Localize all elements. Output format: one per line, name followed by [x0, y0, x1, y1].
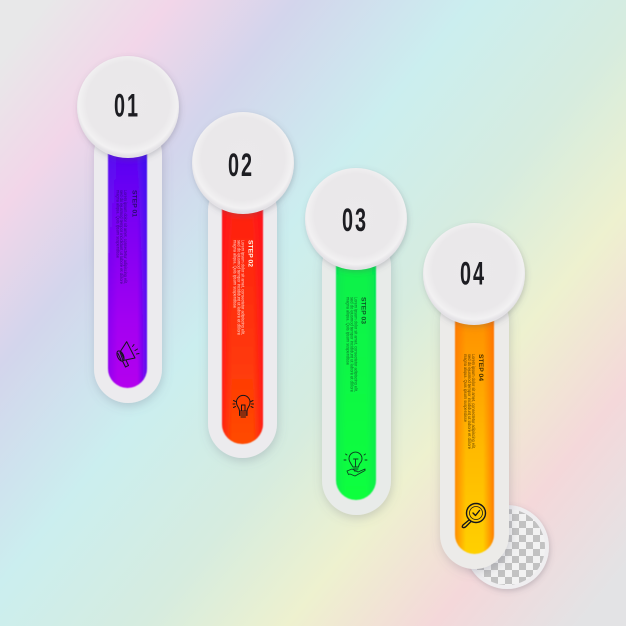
- number disc 02: [192, 112, 294, 214]
- capsule 01: [94, 120, 162, 403]
- capsule 03: [322, 232, 391, 515]
- panel: step 04: [423, 223, 525, 569]
- colour bar 01: [108, 130, 147, 388]
- number disc 02: 02: [228, 147, 252, 183]
- text: step 01: Lorem ipsum dolor sit amet, consectetur adipiscing elit,: [123, 190, 128, 284]
- text: step 04: magna aliqua. Quis ipsum suspendisse: [463, 354, 468, 423]
- text: step 02: [232, 240, 254, 336]
- text: step 02: STEP 02: [246, 240, 254, 267]
- text: step 01: [116, 190, 138, 285]
- text: step 04: sed do eiusmod tempor incididunt ut labore et dolore: [467, 354, 472, 450]
- colour bar 03: [336, 242, 376, 500]
- text: step 01: sed do eiusmod tempor incididunt ut labore et dolore: [119, 190, 124, 285]
- colour bar 02: [222, 186, 263, 444]
- number disc 04: 04: [460, 256, 484, 292]
- transparency checker badge: [465, 505, 549, 589]
- icon: megaphone: [115, 342, 139, 367]
- panel: step 01: [77, 56, 179, 403]
- text: step 02: sed do eiusmod tempor incididunt ut labore et dolore: [236, 240, 242, 336]
- number disc 01: [77, 56, 179, 158]
- text: step 02: magna aliqua. Quis ipsum suspendisse: [232, 240, 238, 309]
- text: step 03: Lorem ipsum dolor sit amet, consectetur adipiscing elit,: [354, 297, 358, 392]
- number disc 04: [423, 223, 525, 325]
- panel: step 02: [192, 112, 294, 458]
- text: step 01: magna aliqua. Quis ipsum suspendisse: [116, 190, 120, 259]
- text: step 03: magna aliqua. Quis ipsum suspendisse: [346, 297, 350, 366]
- text: step 02: Lorem ipsum dolor sit amet, consectetur adipiscing elit,: [240, 240, 246, 335]
- colour bar 04: [455, 297, 494, 554]
- icon: magnifying glass with check: [462, 504, 486, 528]
- number disc 03: 03: [342, 202, 366, 238]
- number disc 03: [305, 168, 407, 270]
- text: step 03: [346, 297, 366, 393]
- icon: hand holding light bulb: [344, 452, 367, 476]
- text: step 03: sed do eiusmod tempor incididunt ut labore et dolore: [350, 297, 354, 393]
- text: step 01: STEP 01: [130, 190, 138, 217]
- text: step 04: [463, 354, 484, 450]
- text: step 03: STEP 03: [360, 297, 366, 324]
- panel: step 03: [305, 168, 407, 515]
- icon: light bulb: [233, 395, 254, 417]
- capsule 02: [208, 176, 277, 458]
- text: step 04: Lorem ipsum dolor sit amet, consectetur adipiscing elit,: [471, 354, 476, 449]
- capsule 04: [440, 287, 509, 569]
- number disc 01: 01: [114, 88, 138, 124]
- text: step 04: STEP 04: [477, 354, 484, 381]
